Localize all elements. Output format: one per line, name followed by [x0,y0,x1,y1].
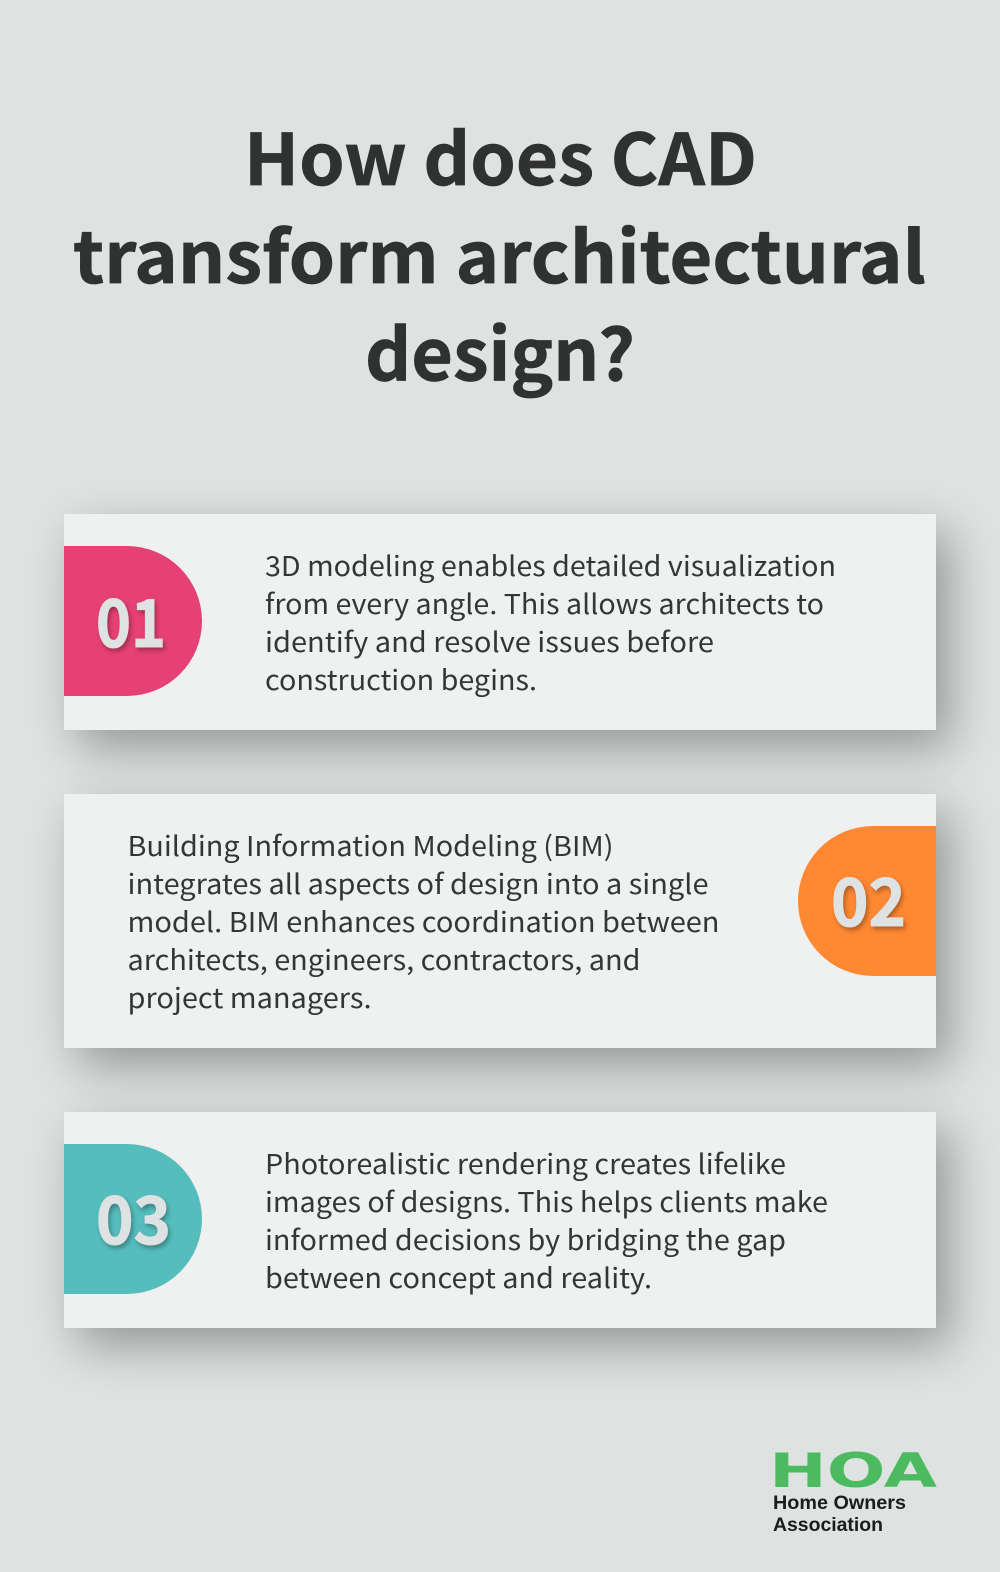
text 01 [265,544,836,698]
text 03: images of designs. This helps clients make [265,1180,828,1220]
card shadow 03 [78,1130,950,1346]
panel: step 03 [64,1112,950,1346]
logo: HOA: Home Owners [773,1492,906,1514]
text 03 [265,1142,828,1296]
text 01: identify and resolve issues before [265,620,714,660]
badge 03 [64,1144,202,1294]
text 02 [128,824,720,1016]
card 01 [64,514,936,730]
logo: HOA: HOA [769,1444,937,1499]
number 01: 01 [96,571,166,667]
card 03 [64,1112,936,1328]
title: design? [365,300,635,402]
text 02: integrates all aspects of design into a single [128,862,708,902]
text 02: model. BIM enhances coordination between [128,900,720,940]
number 02: 02 [831,850,906,946]
logo: HOA [769,1444,937,1536]
number shadow 01: 01 [98,574,168,670]
number shadow 02: 02 [833,853,908,949]
text 01: from every angle. This allows architects to [265,582,824,622]
text 02: project managers. [128,976,372,1016]
logo: HOA: Association [773,1514,883,1536]
card shadow 02 [78,812,950,1066]
number shadow 03: 03 [98,1171,173,1267]
text 01: 3D modeling enables detailed visualization [265,544,836,584]
text 02: architects, engineers, contractors, and [128,938,640,978]
title: How does CAD [244,104,757,206]
badge 01 [64,546,202,696]
panel: step 01 [64,514,950,748]
text 01: construction begins. [265,658,537,698]
badge 02 [798,826,936,976]
card 02 [64,794,936,1048]
text 03: informed decisions by bridging the gap [265,1218,786,1258]
title [73,104,926,402]
text 02: Building Information Modeling (BIM) [128,824,614,864]
title: transform architectural [73,202,926,304]
text 03: Photorealistic rendering creates lifelike [265,1142,786,1182]
number 03: 03 [96,1168,171,1264]
panel: step 02 [64,794,950,1066]
card shadow 01 [78,532,950,748]
text 03: between concept and reality. [265,1256,652,1296]
